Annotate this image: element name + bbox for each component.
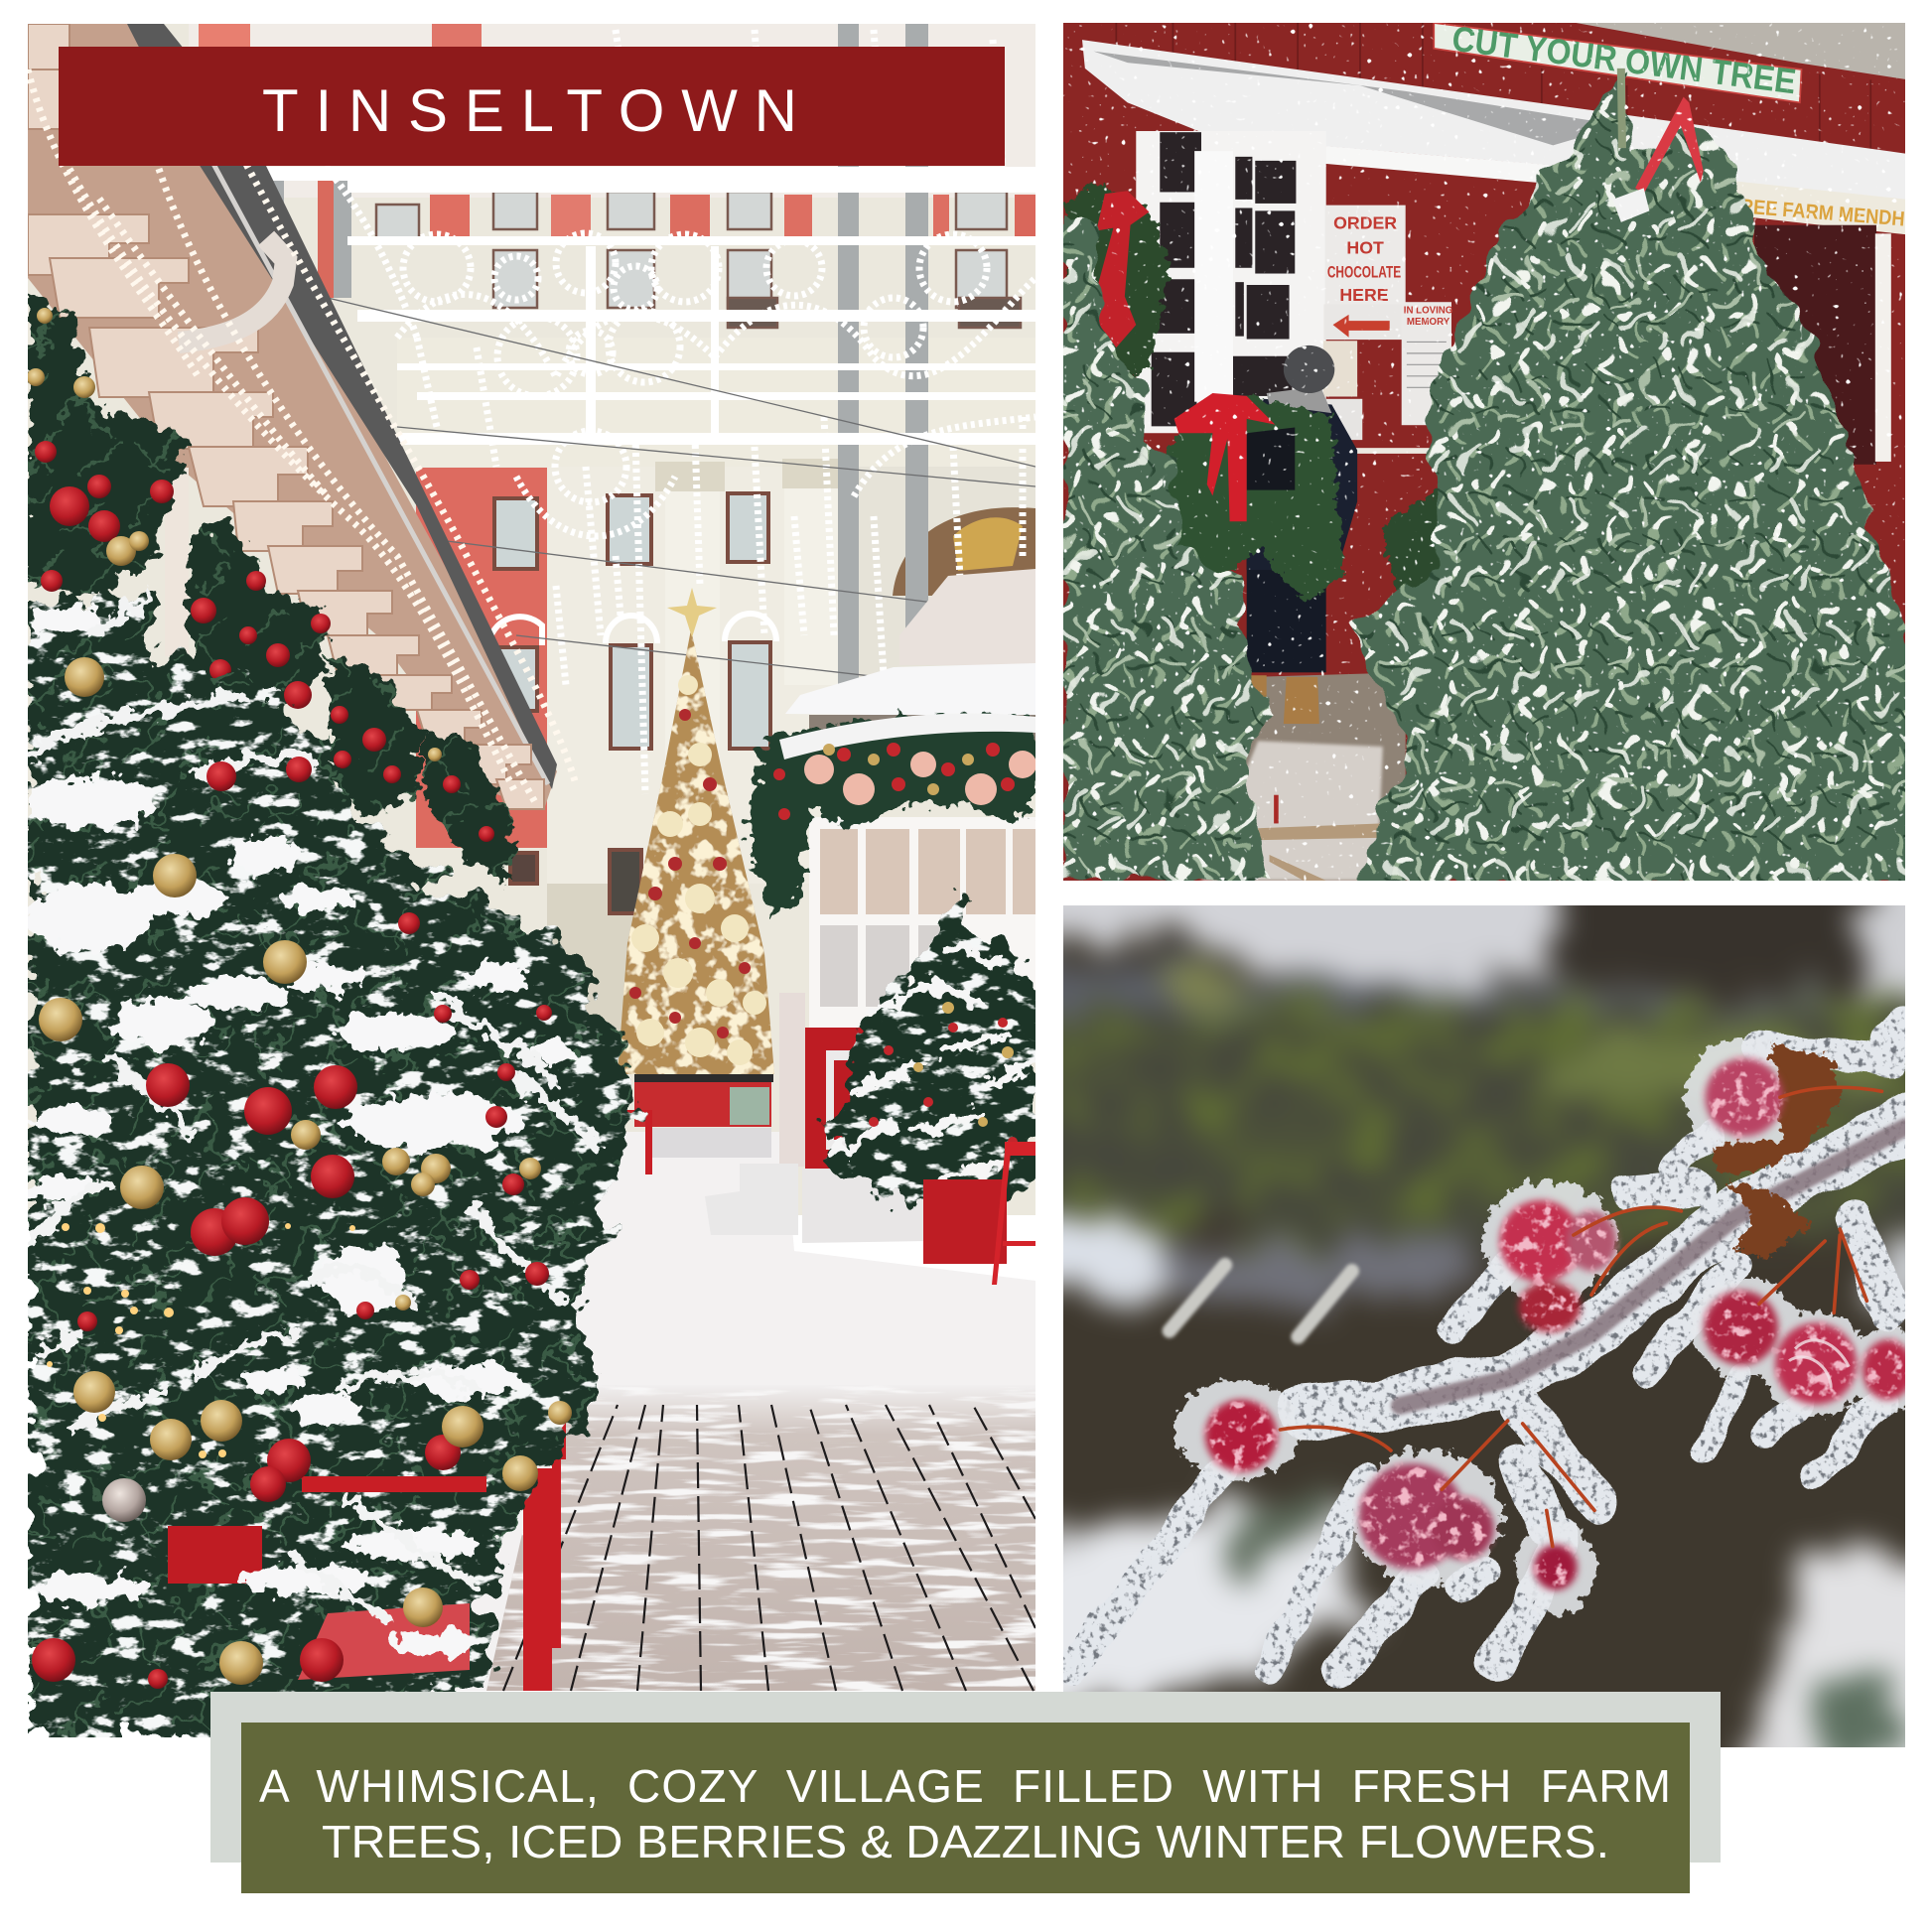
roof light edge (213, 164, 548, 784)
snowy ground (437, 1132, 1035, 1691)
kiosk garland (745, 714, 1036, 923)
porch fascia (1201, 136, 1568, 186)
arrow sign (1323, 305, 1402, 340)
door wreath (1383, 490, 1462, 616)
right fascia with text (1667, 174, 1908, 234)
falling snowflakes (1063, 23, 1905, 881)
branch core (1400, 1127, 1905, 1406)
caption block (210, 1692, 1721, 1893)
grey street poles (266, 24, 928, 709)
plank joints (503, 1405, 1035, 1691)
wooden planks (486, 1385, 1035, 1691)
barn wall (1063, 23, 1908, 884)
hot chocolate notice (1323, 341, 1357, 397)
warm tree lights (47, 1223, 355, 1458)
caption line one: A WHIMSICAL, COZY VILLAGE FILLED WITH FRESH FARM (259, 1760, 1671, 1812)
order hot chocolate sign (1325, 206, 1406, 305)
left wreath (1065, 183, 1171, 387)
porch post (1194, 151, 1233, 402)
red ribbon on tree (1635, 97, 1704, 194)
right fascia with text: TREE FARM MENDH (1728, 195, 1905, 230)
column capitals (655, 459, 842, 491)
garland 4 (423, 735, 513, 884)
foreground benches (436, 1226, 571, 1691)
ground (1212, 672, 1406, 881)
wooden post (184, 468, 189, 475)
caption panel (241, 1723, 1690, 1893)
lower windows (494, 493, 770, 913)
title banner (59, 47, 1005, 166)
roof gutter (127, 24, 557, 789)
ice around berries (1175, 1037, 1925, 1615)
snowy branches (30, 596, 596, 1618)
market roof underside (28, 24, 557, 809)
blurred icicles (1170, 1265, 1352, 1337)
order hot chocolate sign: CHOCOLATE (1327, 263, 1401, 282)
right white post (1875, 233, 1891, 462)
in loving memory sign (1402, 302, 1452, 425)
thin cables (328, 298, 1035, 695)
berries (1205, 1058, 1913, 1590)
caption backing panel (210, 1692, 1721, 1863)
garland 3 (329, 655, 423, 817)
order hot chocolate sign: ORDER (1333, 213, 1397, 233)
ice coating (1070, 1032, 1915, 1672)
snowy path (1201, 741, 1383, 881)
garland 1 (27, 291, 189, 596)
panel: market street photo (25, 24, 1036, 1737)
barn plank seams (1116, 23, 1870, 165)
order hot chocolate sign: HOT (1346, 237, 1384, 257)
window arches (488, 614, 776, 645)
sign: cut your own tree: CUT YOUR OWN TREE (1449, 19, 1798, 101)
in loving memory sign: MEMORY (1407, 317, 1450, 328)
white light structure (189, 167, 1035, 445)
distant decorated tree (618, 629, 774, 1074)
garland 2 (189, 518, 331, 709)
title text: TINSELTOWN (262, 77, 797, 144)
tree top leader (1621, 69, 1622, 148)
distant path (651, 1128, 771, 1158)
bench planter under tree (168, 1526, 470, 1680)
market banner (634, 1074, 773, 1127)
order window ledge (1326, 399, 1362, 440)
stake and board (1235, 795, 1383, 881)
roof metal shade (1093, 52, 1621, 145)
blurred backdrop (957, 798, 1932, 1863)
golden arch (893, 507, 1035, 596)
panel: tree farm photo (1063, 19, 1908, 884)
berry ice highlights (1789, 1340, 1849, 1388)
counter (1354, 448, 1446, 454)
light ornaments (326, 30, 1035, 790)
kiosk steps (705, 1164, 798, 1235)
order hot chocolate sign: HERE (1339, 285, 1389, 305)
price tag (1612, 188, 1649, 222)
caption line two: TREES, ICED BERRIES & DAZZLING WINTER FLOWERS. (322, 1816, 1609, 1867)
bench top (302, 1476, 486, 1492)
snow drifts (25, 607, 582, 1656)
building facade (28, 24, 1035, 1215)
window frame (1136, 131, 1326, 433)
left snowy trees (1063, 216, 1270, 881)
small snowy tree (825, 898, 1035, 1227)
big fir tree (1349, 69, 1908, 884)
kiosk (779, 569, 1035, 1243)
dark right bay (1754, 225, 1876, 465)
foreground tree row (28, 590, 637, 1737)
tree ornaments (32, 657, 572, 1689)
carried wreath (1145, 393, 1343, 604)
red stool (992, 1142, 1035, 1285)
tree star (667, 588, 717, 637)
brown leaves (1715, 1043, 1843, 1259)
porch roof (1082, 40, 1908, 201)
red planter (923, 1179, 1007, 1264)
woods behind barn (1576, 23, 1908, 79)
far red bench (621, 1110, 652, 1174)
downspout (179, 238, 286, 343)
upper windows (376, 192, 1021, 328)
wooden beams (28, 24, 544, 809)
panel: iced berries photo (957, 798, 1932, 1863)
person (1238, 345, 1357, 724)
orange stems (1280, 1087, 1881, 1547)
in loving memory sign: IN LOVING (1404, 306, 1452, 317)
roof fairy lights (28, 69, 576, 804)
